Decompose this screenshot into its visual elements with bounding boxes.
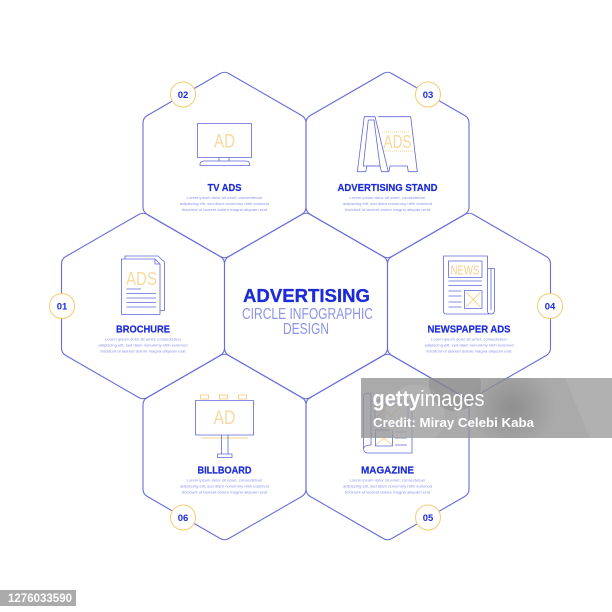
text block: magazine: tincidunt ut laoreet dolore magna aliquam erat [345, 490, 431, 494]
label: billboard: BILLBOARD [198, 465, 252, 477]
badge: 04: 04 [545, 302, 556, 312]
badge: 03 [416, 82, 440, 107]
icon: a-frame stand [357, 117, 417, 172]
panel: center title [224, 213, 388, 399]
icon: billboard [196, 395, 254, 458]
icon: newspaper: NEWS [450, 262, 480, 278]
icon: television: AD [214, 132, 235, 152]
badge: 01 [50, 294, 74, 318]
badge: 04 [538, 294, 562, 318]
text block: advertising stand [343, 195, 432, 212]
text block: advertising stand: tincidunt ut laoreet dolore magna aliquam erat [345, 207, 431, 212]
text block: billboard: tincidunt ut laoreet dolore magna aliquam erat [182, 490, 268, 494]
badge: 02 [170, 82, 196, 107]
label: newspaper ads: NEWSPAPER ADS [428, 324, 510, 336]
text block: tv ads: tincidunt ut laoreet dolore magna aliquam erat [182, 207, 268, 212]
text block: brochure: adipiscing elit, sed diam nonummy nibh euismod [98, 342, 188, 348]
subheading: circle infographic design: DESIGN [283, 321, 329, 338]
text block: magazine: Lorem ipsum dolor sit amet, consectetuer [350, 478, 426, 482]
panel: advertising stand [306, 72, 469, 258]
icon: newspaper [444, 256, 494, 314]
image id tag: 1276033590 [8, 593, 72, 605]
watermark: getty images banner [361, 378, 612, 438]
panel: magazine [306, 354, 469, 540]
text block: billboard [180, 478, 269, 494]
text block: tv ads: adipiscing elit, sed diam nonummy nibh euismod [180, 201, 269, 206]
text block: advertising stand: adipiscing elit, sed diam nonummy nibh euismod [343, 201, 432, 206]
label: brochure: BROCHURE [116, 324, 170, 336]
badge: 06: 06 [178, 513, 188, 524]
label: advertising stand: ADVERTISING STAND [338, 182, 438, 194]
badge: 01: 01 [57, 302, 68, 312]
watermark text: gettyimages: gettyimages [372, 386, 484, 411]
watermark text: credit: Credit: Miray Celebi Kaba [373, 416, 535, 430]
text block: magazine: adipiscing elit, sed diam nonummy nibh euismod [343, 484, 432, 488]
icon: a-frame stand: ADS [384, 132, 412, 152]
badge: 02: 02 [178, 90, 188, 101]
panel: tv ads [143, 72, 306, 258]
subheading: circle infographic design [242, 306, 373, 338]
label: magazine: MAGAZINE [361, 465, 414, 477]
text block: tv ads: Lorem ipsum dolor sit amet, consectetuer [186, 195, 263, 200]
icon: brochure: ADS [126, 269, 157, 289]
text block: advertising stand: Lorem ipsum dolor sit amet, consectetuer [350, 195, 426, 200]
text block: newspaper ads: Lorem ipsum dolor sit amet, consectetuer [431, 336, 508, 342]
panel: brochure [50, 213, 224, 399]
panel: billboard [143, 354, 306, 540]
text block: billboard: Lorem ipsum dolor sit amet, consectetuer [186, 478, 263, 482]
text block: billboard: adipiscing elit, sed diam nonummy nibh euismod [180, 484, 269, 488]
icon: billboard: AD [214, 408, 236, 429]
icon: television [198, 124, 252, 166]
heading: advertising: ADVERTISING [243, 285, 370, 306]
badge: 05 [416, 505, 440, 530]
text block: newspaper ads: tincidunt ut laoreet dolore magna aliquam erat [426, 348, 512, 354]
text block: brochure: Lorem ipsum dolor sit amet, consectetuer [105, 336, 182, 342]
badge: 03: 03 [423, 90, 433, 101]
subheading: circle infographic design: CIRCLE INFOGRAPHIC [242, 306, 373, 323]
text block: newspaper ads [424, 336, 514, 354]
panel: newspaper ads [388, 213, 562, 399]
text block: brochure [98, 336, 188, 354]
icon: brochure [122, 256, 164, 314]
badge: 06 [170, 505, 196, 530]
text block: magazine [343, 478, 432, 494]
badge: 05: 05 [423, 513, 434, 524]
image id tag [0, 590, 76, 606]
text block: brochure: tincidunt ut laoreet dolore magna aliquam erat [100, 348, 186, 354]
text block: tv ads [180, 195, 269, 212]
icon: magazine [364, 393, 412, 453]
text block: newspaper ads: adipiscing elit, sed diam nonummy nibh euismod [424, 342, 514, 348]
label: tv ads: TV ADS [208, 182, 242, 194]
